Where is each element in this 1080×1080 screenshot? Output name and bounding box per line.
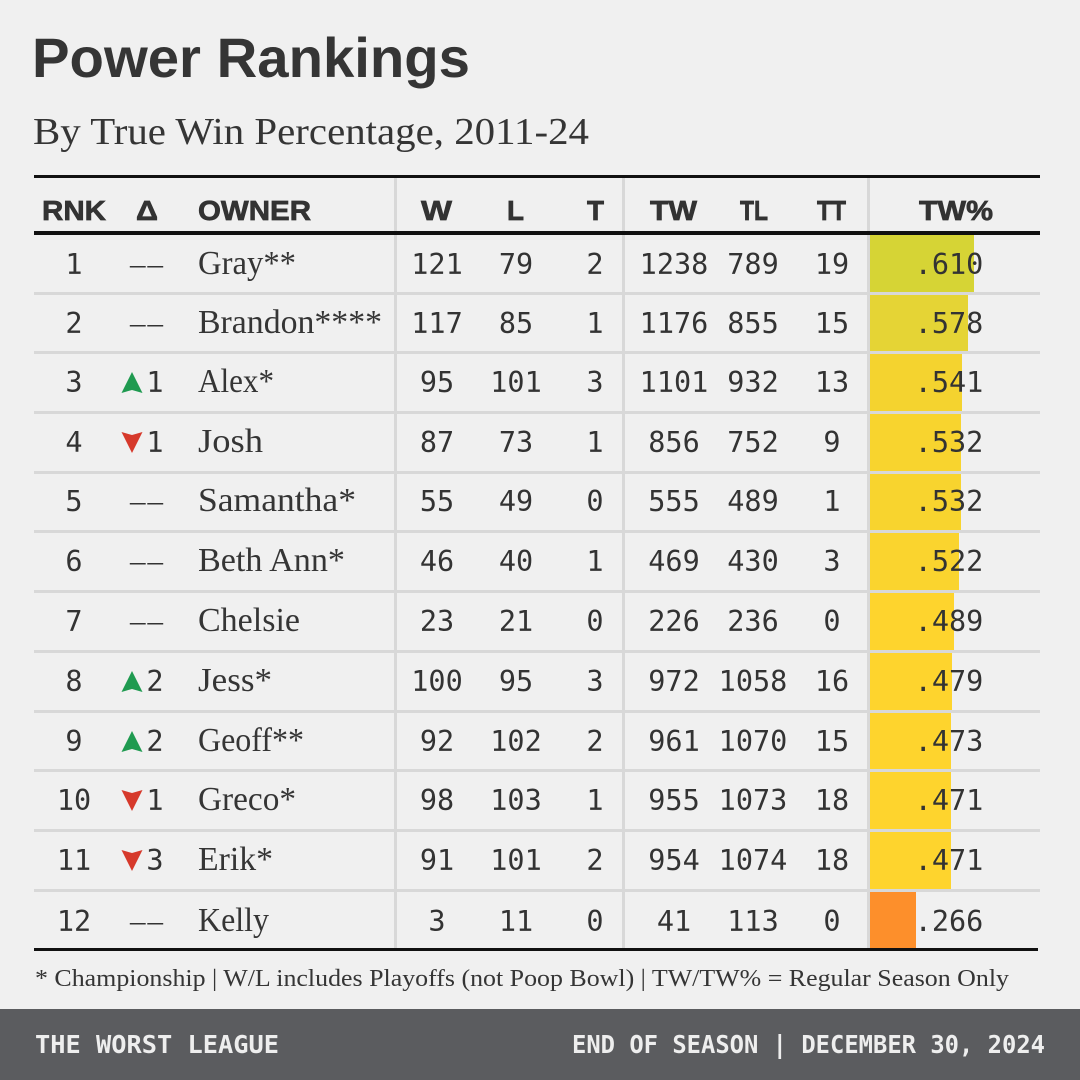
row 10: Greco: 955 [648, 784, 700, 817]
icon: red down arrow [122, 850, 142, 871]
header row: TW [650, 195, 698, 226]
row 11: Erik: 2 [586, 844, 604, 877]
header row: TL [740, 195, 768, 226]
row 4: Josh: 9 [823, 426, 841, 459]
row 1: Gray: 1 [65, 248, 83, 281]
row 3: Alex: 3 [65, 366, 83, 399]
row 3: Alex [65, 363, 983, 400]
row 5: Samantha: 55 [420, 485, 454, 518]
row 10: Greco: Greco* [198, 781, 296, 818]
row 10: Greco: 18 [815, 784, 849, 817]
row 3: Alex: 1101 [640, 366, 708, 399]
row 12: Kelly: 113 [727, 905, 779, 938]
row 4: Josh: 752 [727, 426, 779, 459]
row 5: Samantha: .532 [915, 485, 983, 518]
row 2: Brandon: .578 [915, 307, 983, 340]
header row: RNK [42, 195, 106, 226]
row 3: Alex: 95 [420, 366, 454, 399]
row 7: Chelsie: 23 [420, 605, 454, 638]
row 4: Josh: 73 [499, 426, 533, 459]
row 11: Erik: 3 [146, 844, 164, 877]
row 2: Brandon: Brandon**** [198, 304, 382, 341]
icon: red down arrow [122, 432, 142, 453]
row 11: Erik: 91 [420, 844, 454, 877]
row 6: Beth Ann: 6 [65, 545, 83, 578]
row 10: Greco: 1 [146, 784, 164, 817]
row 7: Chelsie: 236 [727, 605, 779, 638]
row 1: Gray: 789 [727, 248, 779, 281]
row 6: Beth Ann: 469 [648, 545, 700, 578]
row 7: Chelsie: .489 [915, 605, 983, 638]
row 2: Brandon: 85 [499, 307, 533, 340]
row 8: Jess: 95 [499, 665, 533, 698]
row 12: Kelly: 0 [586, 905, 604, 938]
row 3: Alex: 3 [586, 366, 604, 399]
row 12: Kelly: Kelly [198, 902, 269, 939]
icon: green up arrow [122, 372, 142, 393]
row 8: Jess: .479 [915, 665, 983, 698]
header row [42, 195, 993, 226]
row 3: Alex: 1 [146, 366, 164, 399]
row 12: Kelly: 41 [657, 905, 691, 938]
row 5: Samantha: 489 [727, 485, 779, 518]
row 4: Josh: 856 [648, 426, 700, 459]
row 10: Greco: 1073 [719, 784, 787, 817]
row 7: Chelsie: 7 [65, 605, 83, 638]
row 5: Samantha: –– [129, 483, 165, 518]
row 10: Greco: 1 [586, 784, 604, 817]
row 6: Beth Ann: 1 [586, 545, 604, 578]
row 6: Beth Ann: 3 [823, 545, 841, 578]
row 7: Chelsie: –– [129, 603, 165, 638]
row 11: Erik: Erik* [198, 841, 273, 878]
title: Power Rankings [32, 26, 470, 89]
header row: TW% [919, 195, 993, 226]
row 1: Gray: 1238 [640, 248, 708, 281]
row 8: Jess: 16 [815, 665, 849, 698]
row 5: Samantha: 5 [65, 485, 83, 518]
row 6: Beth Ann [65, 542, 983, 579]
row 9: Geoff [65, 722, 983, 759]
row 8: Jess: 8 [65, 665, 83, 698]
row 1: Gray [65, 245, 983, 282]
row 12: Kelly: .266 [915, 905, 983, 938]
row 1: Gray: –– [129, 246, 165, 281]
row 7: Chelsie: 0 [823, 605, 841, 638]
footnote: * Championship | W/L includes Playoffs (not Poop Bowl) | TW/TW% = Regular Season Only [35, 966, 1009, 992]
row 9: Geoff: 102 [490, 725, 542, 758]
row 3: Alex: 101 [490, 366, 542, 399]
row 4: Josh: .532 [915, 426, 983, 459]
row 6: Beth Ann: 430 [727, 545, 779, 578]
row 12: Kelly [57, 902, 983, 939]
row 8: Jess [65, 662, 983, 699]
row 2: Brandon: 117 [411, 307, 463, 340]
header row: TT [817, 195, 846, 226]
row 9: Geoff: 961 [648, 725, 700, 758]
header row: T [587, 195, 604, 226]
row 7: Chelsie: 21 [499, 605, 533, 638]
row 6: Beth Ann: 46 [420, 545, 454, 578]
row 6: Beth Ann: –– [129, 543, 165, 578]
row 5: Samantha [65, 482, 983, 519]
row 11: Erik [57, 841, 983, 878]
row 1: Gray: .610 [915, 248, 983, 281]
footer date: END OF SEASON | DECEMBER 30, 2024 [572, 1030, 1045, 1059]
header row: Δ [136, 195, 158, 226]
row 11: Erik: 1074 [719, 844, 787, 877]
row 12: Kelly: 0 [823, 905, 841, 938]
row 2: Brandon: 1 [586, 307, 604, 340]
header row: W [421, 195, 453, 226]
row 4: Josh: Josh [198, 423, 263, 460]
row 9: Geoff: 2 [146, 725, 164, 758]
row 11: Erik: 18 [815, 844, 849, 877]
row 9: Geoff: 1070 [719, 725, 787, 758]
row 3: Alex: Alex* [198, 363, 274, 400]
table [34, 175, 1040, 951]
row 4: Josh [65, 423, 983, 460]
row 3: Alex: .541 [915, 366, 983, 399]
subtitle: By True Win Percentage, 2011-24 [33, 111, 589, 153]
row 6: Beth Ann: Beth Ann* [198, 542, 345, 579]
row 10: Greco [57, 781, 983, 818]
row 2: Brandon: 855 [727, 307, 779, 340]
row 10: Greco: .471 [915, 784, 983, 817]
row 7: Chelsie: 226 [648, 605, 700, 638]
row 12: Kelly: 11 [499, 905, 533, 938]
row 7: Chelsie [65, 602, 983, 639]
row 2: Brandon: –– [129, 305, 165, 340]
header row: OWNER [198, 195, 311, 226]
row 10: Greco: 103 [490, 784, 542, 817]
row 4: Josh: 87 [420, 426, 454, 459]
footer league name: THE WORST LEAGUE [35, 1030, 279, 1059]
header row: L [507, 195, 524, 226]
row 1: Gray: 19 [815, 248, 849, 281]
row 8: Jess: 3 [586, 665, 604, 698]
row 11: Erik: .471 [915, 844, 983, 877]
row 11: Erik: 11 [57, 844, 91, 877]
row 11: Erik: 954 [648, 844, 700, 877]
row 4: Josh: 1 [146, 426, 164, 459]
icon: red down arrow [122, 790, 142, 811]
row 9: Geoff: 2 [586, 725, 604, 758]
row 9: Geoff: .473 [915, 725, 983, 758]
row 8: Jess: 2 [146, 665, 164, 698]
row 2: Brandon: 1176 [640, 307, 708, 340]
row 3: Alex: 932 [727, 366, 779, 399]
icon: green up arrow [122, 671, 142, 692]
row 3: Alex: 13 [815, 366, 849, 399]
row 9: Geoff: 9 [65, 725, 83, 758]
row 5: Samantha: 1 [823, 485, 841, 518]
row 7: Chelsie: Chelsie [198, 602, 300, 639]
row 8: Jess: 972 [648, 665, 700, 698]
row 1: Gray: 121 [411, 248, 463, 281]
row 5: Samantha: 49 [499, 485, 533, 518]
row 9: Geoff: 15 [815, 725, 849, 758]
row 8: Jess: 1058 [719, 665, 787, 698]
row 9: Geoff: Geoff** [198, 722, 304, 759]
row 12: Kelly: 3 [428, 905, 446, 938]
row 9: Geoff: 92 [420, 725, 454, 758]
row 1: Gray: 79 [499, 248, 533, 281]
row 4: Josh: 1 [586, 426, 604, 459]
row 6: Beth Ann: .522 [915, 545, 983, 578]
row 5: Samantha: 0 [586, 485, 604, 518]
row 2: Brandon: 2 [65, 307, 83, 340]
row 12: Kelly: 12 [57, 905, 91, 938]
row 12: Kelly: –– [129, 903, 165, 938]
row 2: Brandon: 15 [815, 307, 849, 340]
row 8: Jess: Jess* [198, 662, 272, 699]
footer bar [0, 1009, 1080, 1080]
row 10: Greco: 98 [420, 784, 454, 817]
row 4: Josh: 4 [65, 426, 83, 459]
icon: green up arrow [122, 731, 142, 752]
row 1: Gray: 2 [586, 248, 604, 281]
row 11: Erik: 101 [490, 844, 542, 877]
row 8: Jess: 100 [411, 665, 463, 698]
row 7: Chelsie: 0 [586, 605, 604, 638]
TW% bars [870, 235, 974, 948]
row 10: Greco: 10 [57, 784, 91, 817]
row 2: Brandon [65, 304, 983, 341]
row 6: Beth Ann: 40 [499, 545, 533, 578]
row 1: Gray: Gray** [198, 245, 296, 282]
row 5: Samantha: Samantha* [198, 482, 356, 519]
row 5: Samantha: 555 [648, 485, 700, 518]
